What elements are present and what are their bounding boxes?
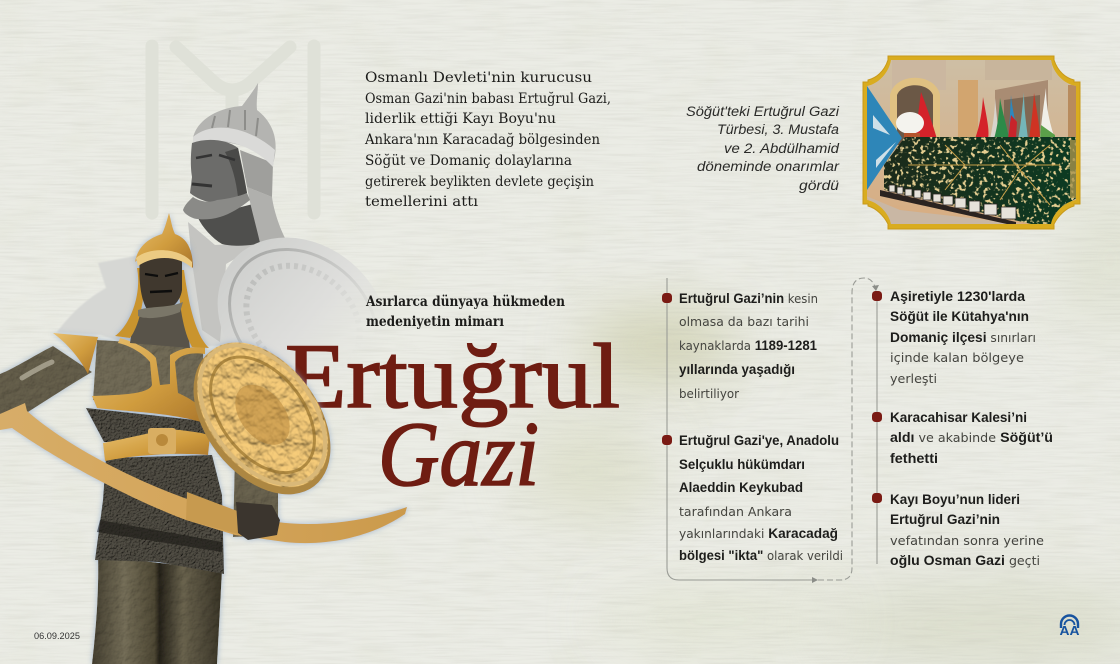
text block: right column third item: vefatından sonra yerine	[890, 533, 1044, 548]
grey face	[190, 140, 247, 203]
timeline connectors	[667, 278, 877, 580]
text block: left column second item: bölgesi "ikta" olarak verildi	[679, 547, 843, 563]
braids	[115, 268, 144, 338]
icon: AA logo: AA	[1060, 623, 1080, 638]
gold shoulder plate	[53, 333, 98, 374]
golden statue of Ertuğrul Gazi	[0, 213, 407, 664]
grey neck	[198, 203, 262, 246]
mail skirt	[95, 455, 224, 574]
text block: right column first item: Söğüt ile Kütahya'nın	[890, 308, 1029, 324]
photo	[867, 60, 1076, 224]
text block: right column second item: aldı ve akabinde Söğüt’ü	[890, 429, 1053, 445]
gold shield	[166, 318, 358, 520]
tomb caption: ve 2. Abdülhamid	[724, 141, 840, 156]
tomb caption: Türbesi, 3. Mustafa	[717, 122, 840, 137]
text block: right column first item: Domaniç ilçesi sınırları	[890, 329, 1036, 345]
text block: left column second item: Ertuğrul Gazi'ye, Anadolu	[679, 432, 839, 448]
tomb caption: gördü	[799, 178, 840, 193]
icon: AA logo	[1060, 616, 1080, 638]
text block: left column first item: olmasa da bazı tarihi	[679, 314, 809, 329]
flags	[867, 86, 902, 190]
intro text: temellerini attı	[365, 194, 479, 210]
subtitle	[365, 294, 565, 330]
intro text	[364, 70, 611, 210]
grey hair	[240, 150, 273, 197]
green cloth	[884, 137, 1078, 226]
date: 06.09.2025	[34, 631, 80, 641]
text block: right column third item: Kayı Boyu’nun lideri	[890, 491, 1020, 507]
intro text: liderlik ettiği Kayı Boyu'nu	[365, 111, 556, 127]
white turban	[896, 112, 924, 134]
tomb caption: Söğüt'teki Ertuğrul Gazi	[686, 104, 840, 119]
mail waist	[86, 408, 213, 442]
text block: left column first item	[679, 290, 818, 401]
text block: left column first item: belirtiliyor	[679, 386, 740, 401]
floor	[867, 196, 1022, 224]
subtitle: Asırlarca dünyaya hükmeden	[365, 294, 565, 310]
text block: right column second item: fethetti	[890, 450, 938, 466]
subtitle: medeniyetin mimarı	[366, 314, 504, 330]
intro text: Söğüt ve Domaniç dolaylarına	[365, 153, 572, 169]
plaques	[880, 190, 1016, 226]
gold chest harness	[92, 338, 212, 424]
neck	[130, 305, 190, 348]
grey mail collar	[188, 222, 262, 342]
grey chain	[247, 187, 285, 243]
sword blade and hilt	[0, 403, 407, 543]
text block: right column third item: Ertuğrul Gazi’nin	[890, 511, 1000, 527]
tomb caption: döneminde onarımlar	[697, 159, 840, 174]
text block: right column first item: Aşiretiyle 1230'larda	[890, 288, 1025, 304]
helmet	[135, 213, 193, 268]
legs	[92, 556, 222, 664]
intro text: Osmanlı Devleti'nin kurucusu	[365, 70, 592, 86]
text block: left column second item: Alaeddin Keykubad	[679, 479, 803, 495]
left timeline line	[667, 278, 814, 580]
timeline markers	[662, 291, 882, 503]
frame	[863, 56, 1080, 229]
left arm	[0, 346, 92, 414]
text block: left column second item: Selçuklu hükümdarı	[679, 456, 805, 472]
intro text: Ankara'nın Karacadağ bölgesinden	[364, 132, 600, 148]
intro text: getirerek beylikten devlete geçişin	[365, 174, 594, 190]
right timeline line	[876, 300, 878, 564]
grey statue background	[57, 83, 422, 437]
tomb photo with gold frame	[860, 54, 1082, 230]
rune emblem watermark	[152, 46, 314, 213]
text block: right column second item	[890, 409, 1053, 466]
text block: right column first item	[890, 288, 1036, 386]
text block: right column first item: yerleşti	[890, 371, 937, 386]
wall panels	[892, 60, 946, 90]
hand	[236, 502, 280, 540]
chest	[93, 340, 212, 422]
main title	[285, 325, 620, 505]
tomb caption	[686, 104, 840, 193]
main title: Gazi	[378, 403, 539, 505]
forearm	[233, 455, 278, 537]
grey shoulder	[57, 250, 232, 350]
belt	[103, 430, 210, 461]
text block: right column second item: Karacahisar Kalesi’ni	[890, 409, 1027, 425]
text block: left column first item: yıllarında yaşadığı	[679, 361, 795, 377]
text block: left column first item: kaynaklarda 1189-1281	[679, 337, 817, 353]
text block: right column first item: içinde kalan bölgeye	[890, 350, 1024, 365]
main title: Ertuğrul	[285, 325, 620, 427]
grey helmet	[193, 83, 276, 165]
text block: left column first item: Ertuğrul Gazi’nin kesin	[679, 290, 818, 306]
face	[139, 258, 182, 313]
grey round shield	[184, 203, 422, 437]
arm highlight	[22, 362, 52, 378]
connector arrowheads	[812, 285, 879, 583]
intro text: Osman Gazi'nin babası Ertuğrul Gazi,	[365, 91, 611, 107]
text block: left column second item: tarafından Ankara	[679, 504, 792, 519]
text block: left column second item: yakınlarındaki Karacadağ	[679, 525, 838, 541]
text block: right column third item: oğlu Osman Gazi geçti	[890, 552, 1040, 568]
dashed connector	[818, 278, 875, 580]
text block: left column second item	[679, 432, 843, 563]
text block: right column third item	[890, 491, 1044, 568]
